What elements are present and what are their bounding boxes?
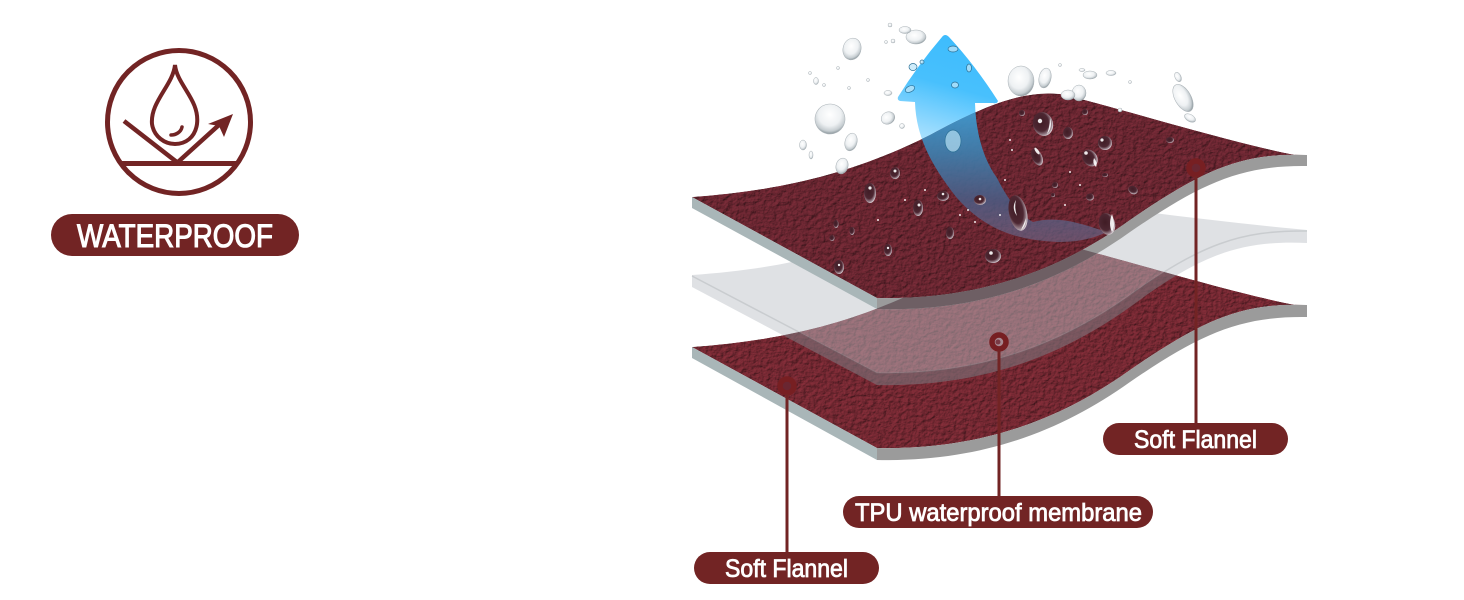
water droplets on the arrow xyxy=(904,46,972,152)
arrow: moisture vapour rising, over fabric xyxy=(922,112,1104,242)
icon: waterproof droplet badge xyxy=(108,50,250,194)
callout: top Soft Flannel xyxy=(1103,161,1288,455)
layer: top soft flannel xyxy=(692,93,1307,309)
callout: bottom Soft Flannel: Soft Flannel xyxy=(725,555,848,583)
callout: TPU waterproof membrane xyxy=(843,335,1153,528)
layer: bottom soft flannel xyxy=(692,243,1307,460)
arrow: moisture vapour rising, upper part xyxy=(898,35,1107,242)
droplet highlights xyxy=(838,118,1114,266)
callout: top Soft Flannel: Soft Flannel xyxy=(1134,426,1257,454)
label: WATERPROOF: WATERPROOF xyxy=(77,218,273,254)
water droplets above the fabric xyxy=(800,23,1197,175)
layer: TPU waterproof membrane xyxy=(692,196,1307,385)
callout: bottom Soft Flannel xyxy=(694,379,879,584)
water droplets on the fabric xyxy=(830,109,1174,274)
callout: TPU waterproof membrane: TPU waterproof membrane xyxy=(855,499,1142,527)
